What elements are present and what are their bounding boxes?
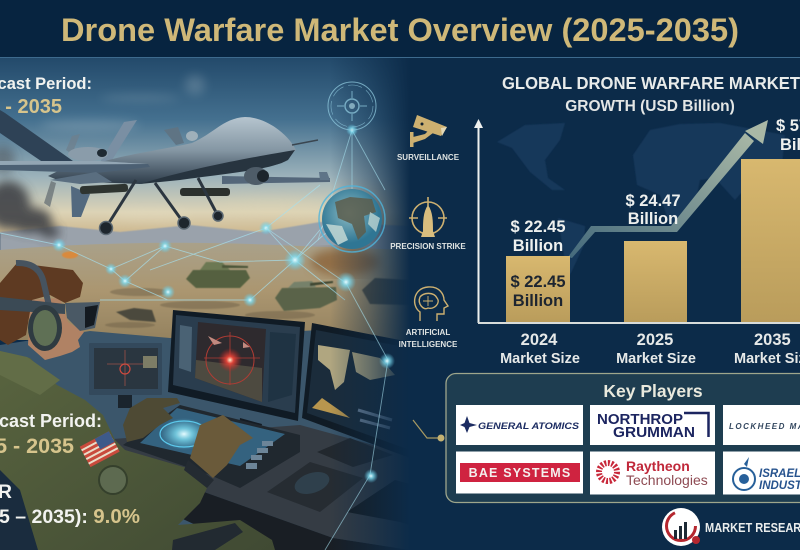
hud reticle: [328, 82, 376, 130]
world map backdrop: [497, 123, 785, 275]
axis labels 2024: [500, 331, 580, 367]
y axis arrowhead: [474, 119, 483, 128]
logo: bae systems: BAE SYSTEMS: [469, 466, 571, 480]
label: intelligence: INTELLIGENCE: [399, 340, 458, 349]
tank left: [186, 262, 250, 288]
logo: northrop grumman: [590, 405, 715, 445]
axis labels 2035: [734, 331, 800, 367]
desk surface: [114, 425, 395, 547]
desk front: [184, 492, 402, 550]
value labels 2035: [776, 117, 800, 154]
network nodes: [52, 221, 306, 307]
sky: [0, 58, 410, 233]
mountains: [0, 222, 406, 250]
axis labels 2025: Market Size: [616, 351, 696, 367]
main monitor: [168, 310, 305, 426]
antennas: [164, 127, 184, 145]
application icons: [390, 115, 466, 349]
value labels 2024: Billion: [513, 237, 563, 255]
icon: artificial intelligence: [415, 287, 448, 321]
bar chart: [474, 117, 800, 367]
axis labels 2024: 2024: [521, 331, 558, 349]
logo: general atomics: [456, 405, 583, 445]
growth arrow: [568, 133, 754, 258]
label: precision strike: PRECISION STRIKE: [390, 242, 466, 251]
fuselage: [48, 117, 296, 184]
value labels 2024: Billion: [513, 292, 563, 310]
control console: [123, 405, 300, 488]
axis labels 2035: 2035: [754, 331, 791, 349]
logo: general atomics: GENERAL ATOMICS: [478, 421, 580, 432]
desert texture: [105, 288, 315, 328]
key players heading: Key Players: [603, 381, 703, 401]
neck and face: [28, 298, 84, 360]
main wing: [0, 161, 150, 173]
chart heading: [502, 73, 800, 115]
desert ground: [0, 243, 410, 340]
pilot: [0, 263, 275, 550]
headset band: [16, 263, 50, 310]
axis labels 2025: 2025: [637, 331, 673, 349]
icon: precision strike: [409, 197, 447, 237]
logo: northrop grumman: GRUMMAN: [613, 425, 695, 441]
value labels 2025: Billion: [628, 210, 678, 228]
lower tail fin: [71, 186, 90, 217]
logo: raytheon technologies: Raytheon: [626, 458, 690, 474]
panel: key players: [446, 374, 800, 502]
upper network nodes: [336, 124, 395, 483]
chair arm: [172, 523, 243, 550]
far glove: [123, 398, 180, 442]
icon: surveillance camera: [410, 115, 447, 147]
jacket torso: [0, 351, 275, 550]
engine: [68, 147, 108, 160]
header rule: [0, 57, 800, 58]
logo: israel aerospace industries: [723, 452, 800, 494]
distant tank: [362, 278, 403, 305]
panel box: [446, 374, 800, 502]
axis labels 2024: Market Size: [500, 351, 580, 367]
logo: raytheon technologies: [590, 452, 715, 494]
value labels 2025: $ 24.47: [625, 192, 681, 210]
upper network links: [266, 130, 388, 550]
field artillery: [116, 308, 156, 322]
right side fade: [330, 58, 410, 550]
visor strap: [0, 297, 65, 314]
bar 2024: [506, 256, 570, 323]
title: Drone Warfare Market Overview (2025-2035): [61, 12, 739, 48]
usa flag patch: [80, 431, 120, 467]
right monitor: [302, 323, 410, 467]
value labels 2024: $ 22.45: [510, 218, 566, 236]
ear cup: [28, 305, 62, 351]
brand logo: [662, 508, 700, 546]
y axis: [478, 125, 480, 323]
v tail: [100, 120, 137, 162]
bar 2035: [741, 159, 800, 323]
drone: [0, 110, 330, 234]
control room wall: [0, 330, 377, 541]
bar 2025: [624, 241, 687, 323]
label: surveillance: SURVEILLANCE: [397, 153, 460, 162]
label: artificial: ARTIFICIAL: [406, 328, 450, 337]
propeller blades: [66, 134, 80, 154]
unit patch: [99, 466, 127, 494]
logo: lockheed martin: [723, 405, 800, 445]
near glove: [190, 415, 253, 478]
arrow head: [745, 120, 768, 144]
far wing: [222, 176, 330, 184]
value labels 2024: [510, 218, 566, 310]
chair back: [0, 470, 38, 550]
logo: bae systems: [456, 452, 583, 494]
brand: market research future: [662, 508, 800, 546]
clouds: [44, 73, 207, 133]
rear wing: [0, 110, 73, 163]
vr visor: [65, 302, 100, 331]
network lines: [0, 185, 353, 300]
keyboard: [347, 482, 392, 520]
missiles: [80, 184, 128, 194]
logo: northrop grumman: NORTHROP: [597, 412, 683, 428]
chart title line 2: GROWTH (USD Billion): [565, 98, 735, 115]
sensor ball: [244, 167, 268, 185]
landing gear: [107, 178, 217, 226]
left monitor: [89, 343, 162, 408]
hair: [0, 263, 83, 345]
axis labels 2025: [616, 331, 696, 367]
holographic globe: [319, 186, 385, 252]
panel: military drone scene: [0, 58, 410, 550]
mouse and pad: [267, 462, 363, 512]
value labels 2025: [625, 192, 681, 228]
connector to key players: [413, 420, 444, 442]
x axis: [478, 322, 800, 324]
explosion flash: [62, 252, 78, 258]
forecast callout bottom: [0, 411, 140, 528]
collar: [0, 351, 60, 395]
smoke plume: [0, 146, 60, 238]
logo: raytheon technologies: Technologies: [626, 472, 708, 488]
value labels 2024: $ 22.45: [510, 273, 566, 291]
dust cloud: [310, 248, 380, 276]
tank right: [275, 281, 337, 311]
header bar: [0, 0, 800, 57]
forecast callout top: [0, 75, 92, 118]
